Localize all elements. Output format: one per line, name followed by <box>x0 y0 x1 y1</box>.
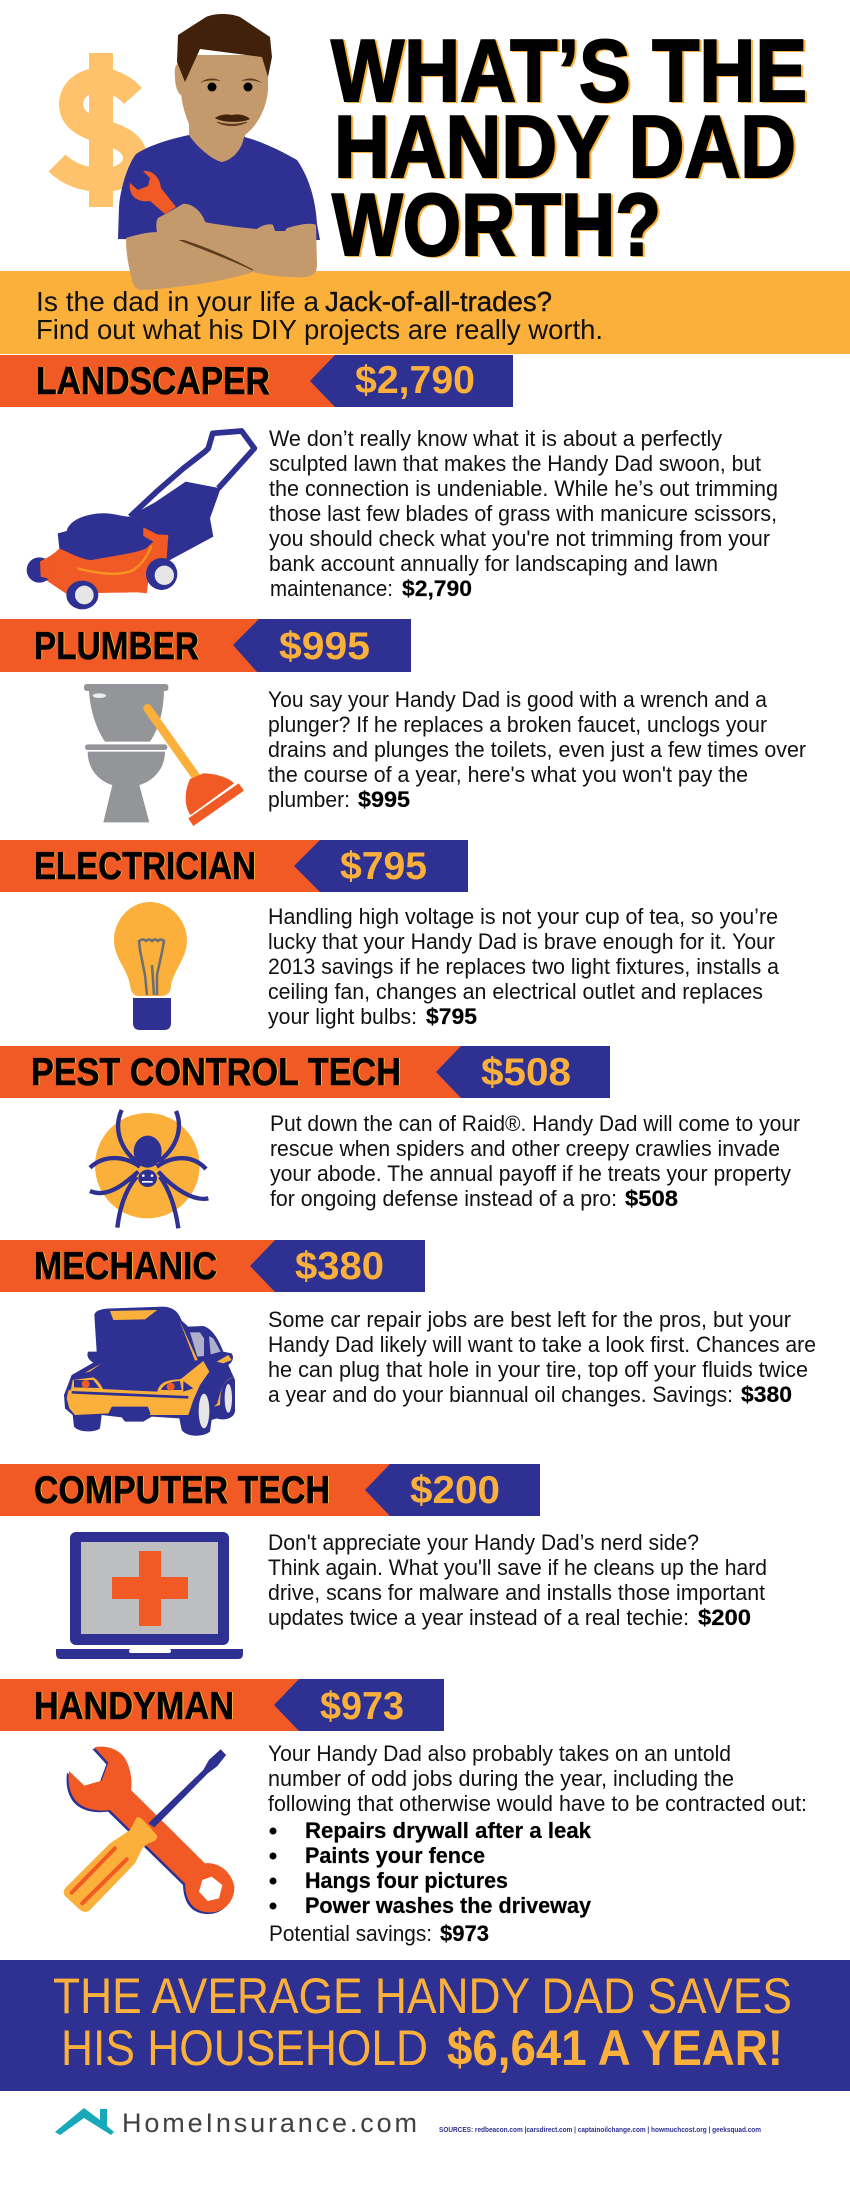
icon: toilet and plunger <box>84 684 244 826</box>
text: plumber: plumber: <box>268 787 350 812</box>
text: landscaper: We don’t really know what it is about a perfectly <box>269 426 722 451</box>
sources: SOURCES: redbeacon.com |carsdirect.com | captainoilchange.com | howmuchcost.org | geeksquad.com <box>439 2127 761 2134</box>
banner: pest control tech: $508 <box>481 1051 571 1094</box>
banner: mechanic <box>0 1240 425 1292</box>
banner: landscaper: $2,790 <box>355 359 475 402</box>
text: computer tech: drive, scans for malware and installs those important <box>268 1580 765 1605</box>
text: mechanic: he can plug that hole in your tire, top off your fluids twice <box>268 1357 808 1382</box>
intro text: Jack-of-all-trades? <box>325 286 552 317</box>
text: handyman: Your Handy Dad also probably takes on an untold <box>268 1741 731 1766</box>
text: handyman: Paints your fence <box>305 1843 485 1868</box>
text: electrician: your light bulbs: <box>268 1004 417 1029</box>
text: mechanic: a year and do your biannual oil changes. Savings: <box>268 1382 733 1407</box>
text: electrician: Handling high voltage is not your cup of tea, so you’re <box>268 904 778 929</box>
text: handyman: Power washes the driveway <box>305 1893 592 1918</box>
text: pest control tech: Put down the can of Raid®. Handy Dad will come to your <box>270 1111 800 1136</box>
title: WORTH? <box>332 175 661 274</box>
text: pest control tech: for ongoing defense instead of a pro: <box>270 1186 617 1211</box>
icon: wrench and screwdriver <box>64 1747 234 1914</box>
text: landscaper <box>269 426 778 601</box>
banner: handyman: HANDYMAN <box>34 1685 234 1728</box>
text: plumber: drains and plunges the toilets, even just a few times over <box>268 737 806 762</box>
text: pest control tech: rescue when spiders and other creepy crawlies invade <box>270 1136 780 1161</box>
intro text: Find out what his DIY projects are really worth. <box>36 314 603 345</box>
banner: electrician: $795 <box>340 845 427 888</box>
text: landscaper: sculpted lawn that makes the Handy Dad swoon, but <box>269 451 761 476</box>
text: plumber <box>268 687 806 812</box>
text: plumber: the course of a year, here's what you won't pay the <box>268 762 748 787</box>
text: computer tech: Think again. What you'll save if he cleans up the hard <box>268 1555 767 1580</box>
text: landscaper: the connection is undeniable. While he’s out trimming <box>269 476 778 501</box>
text: plumber: You say your Handy Dad is good with a wrench and a <box>268 687 768 712</box>
text: electrician <box>268 904 780 1029</box>
text: pest control tech: your abode. The annual payoff if he treats your property <box>270 1161 791 1186</box>
illustration: handy dad <box>118 14 320 290</box>
text: landscaper: maintenance: <box>270 576 393 601</box>
text: mechanic: Handy Dad likely will want to take a look first. Chances are <box>268 1332 816 1357</box>
text: electrician: $795 <box>426 1004 477 1029</box>
text: landscaper: $2,790 <box>402 576 472 601</box>
orange intro band background <box>0 271 850 354</box>
banner: electrician <box>0 840 468 892</box>
text: handyman: Hangs four pictures <box>305 1868 508 1893</box>
icon: light bulb <box>114 902 187 1030</box>
text: plumber: plunger? If he replaces a broken faucet, unclogs your <box>268 712 767 737</box>
icon: lawn mower <box>27 431 254 609</box>
banner: handyman <box>0 1679 444 1731</box>
title: HANDY DAD <box>334 97 796 196</box>
text: handyman: Potential savings: <box>269 1921 432 1946</box>
text: electrician: 2013 savings if he replaces two light fixtures, installs a <box>268 954 780 979</box>
text: computer tech <box>268 1530 767 1630</box>
banner: mechanic: $380 <box>295 1245 384 1288</box>
icon: car with open hood <box>64 1307 235 1436</box>
text: handyman <box>268 1741 807 1946</box>
banner: computer tech <box>0 1464 540 1516</box>
text: mechanic: Some car repair jobs are best left for the pros, but your <box>268 1307 791 1332</box>
icon: house logo <box>55 2108 114 2135</box>
text: handyman: number of odd jobs during the year, including the <box>268 1766 734 1791</box>
banner: handyman: $973 <box>320 1685 404 1728</box>
icon: spider <box>90 1110 208 1228</box>
text: landscaper: bank account annually for landscaping and lawn <box>269 551 718 576</box>
intro text: Is the dad in your life a <box>36 286 319 317</box>
text: mechanic: $380 <box>741 1382 792 1407</box>
icon: dollar sign <box>57 53 135 207</box>
text: handyman: following that otherwise would have to be contracted out: <box>268 1791 807 1816</box>
text: computer tech: $200 <box>698 1605 751 1630</box>
icon: laptop with medical cross <box>56 1532 243 1659</box>
banner: computer tech: $200 <box>410 1469 500 1512</box>
banner: plumber: $995 <box>279 625 370 668</box>
text: landscaper: you should check what you're not trimming from your <box>269 526 770 551</box>
text: electrician: lucky that your Handy Dad is brave enough for it. Your <box>268 929 775 954</box>
banner: pest control tech: PEST CONTROL TECH <box>31 1051 401 1094</box>
banner: landscaper: LANDSCAPER <box>36 360 270 403</box>
text: pest control tech: $508 <box>625 1186 678 1211</box>
banner: pest control tech <box>0 1046 610 1098</box>
text: plumber: $995 <box>358 787 410 812</box>
text: computer tech: Don't appreciate your Handy Dad’s nerd side? <box>268 1530 699 1555</box>
text: handyman: Repairs drywall after a leak <box>305 1818 592 1843</box>
footer callout: total savings: $6,641 A YEAR! <box>447 2020 783 2076</box>
text: landscaper: those last few blades of grass with manicure scissors, <box>269 501 777 526</box>
intro text <box>36 286 603 345</box>
banner: plumber: PLUMBER <box>34 625 199 668</box>
text: mechanic <box>268 1307 816 1407</box>
logo text: HomeInsurance.com <box>122 2108 417 2138</box>
text: computer tech: updates twice a year instead of a real techie: <box>268 1605 689 1630</box>
banner: electrician: ELECTRICIAN <box>34 845 256 888</box>
banner: plumber <box>0 619 411 672</box>
banner: landscaper <box>0 355 513 407</box>
footer callout: total savings: HIS HOUSEHOLD <box>61 2020 428 2076</box>
text: handyman: $973 <box>440 1921 489 1946</box>
text: pest control tech <box>270 1111 800 1211</box>
text: electrician: ceiling fan, changes an electrical outlet and replaces <box>268 979 763 1004</box>
banner: computer tech: COMPUTER TECH <box>34 1469 330 1512</box>
banner: mechanic: MECHANIC <box>34 1245 217 1288</box>
footer callout: total savings <box>0 1960 850 2091</box>
title <box>331 21 807 274</box>
